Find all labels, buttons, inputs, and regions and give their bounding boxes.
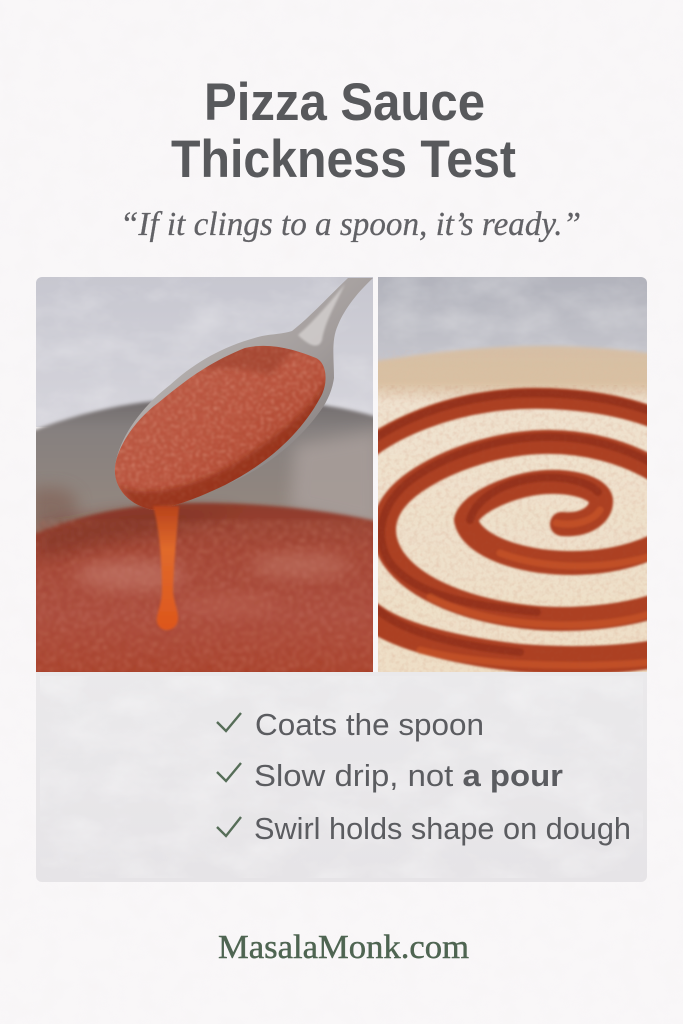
sauce on spoon: [114, 346, 326, 510]
photo: sauce swirl on dough: [370, 277, 655, 680]
dough: [370, 346, 655, 680]
subtitle quote: “If it clings to a spoon, it’s ready.”: [120, 206, 581, 243]
panel: checklist: [36, 672, 647, 882]
sauce in pot: [36, 500, 373, 672]
check item: slow drip: Slow drip, not a pour: [254, 758, 563, 793]
sauce drip: [153, 506, 179, 630]
title: Thickness Test: [171, 130, 516, 189]
title: [171, 73, 516, 189]
check item: coats the spoon: Coats the spoon: [255, 707, 484, 742]
photo: sauce dripping from spoon: [36, 277, 373, 672]
footer: website: MasalaMonk.com: [218, 929, 469, 966]
spoon: [115, 278, 373, 510]
check item: swirl holds shape: Swirl holds shape on dough: [254, 811, 631, 846]
title: Pizza Sauce: [204, 73, 485, 132]
sauce spiral: [370, 393, 655, 665]
pot interior: [36, 398, 373, 536]
